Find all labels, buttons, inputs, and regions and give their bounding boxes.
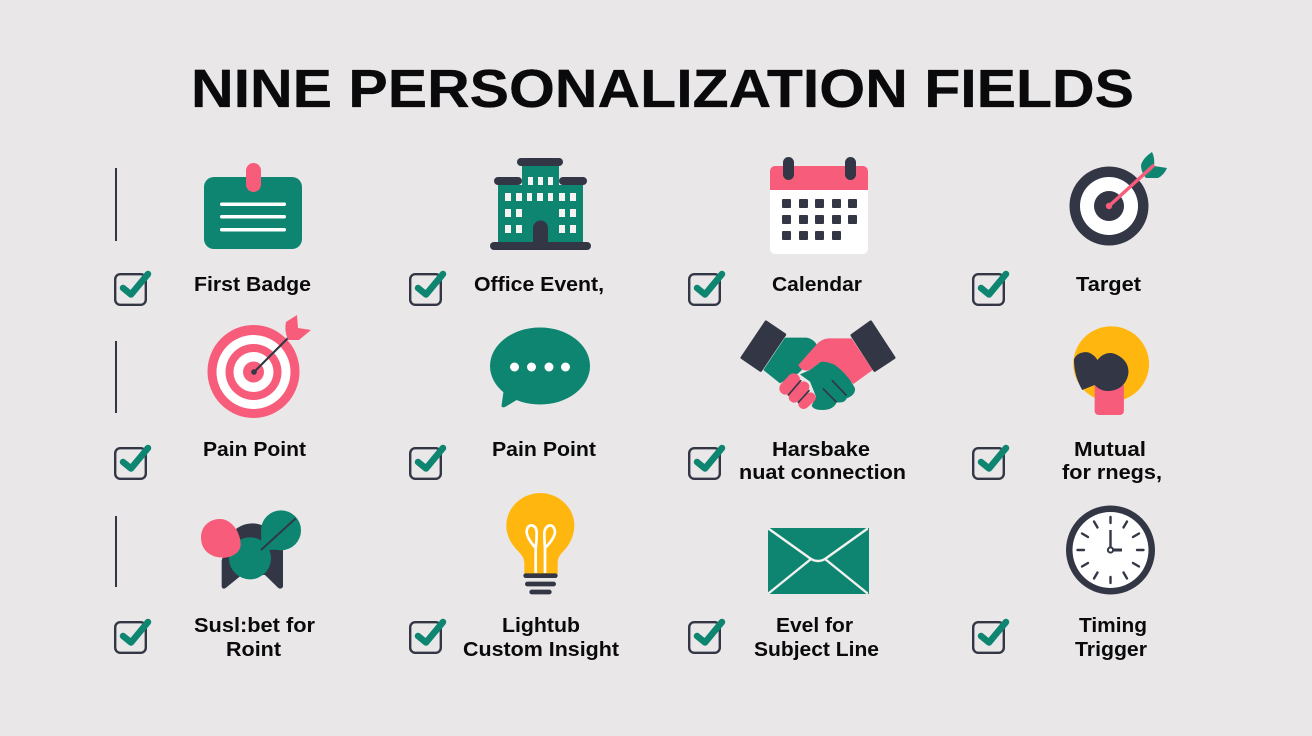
icon: badge bbox=[204, 163, 302, 249]
checkbox: mutual bbox=[973, 448, 1006, 479]
label: first badge: First Badge bbox=[194, 274, 311, 296]
label: subject for point bbox=[194, 615, 315, 661]
label: mutual: for rnegs, bbox=[1062, 462, 1162, 484]
checkbox: target bbox=[973, 274, 1006, 305]
checkbox: first badge bbox=[115, 274, 148, 305]
checkbox: office event bbox=[410, 274, 443, 305]
checkbox: subject line bbox=[689, 622, 722, 653]
checkbox: handshake bbox=[689, 448, 722, 479]
icon: envelope bbox=[768, 528, 869, 594]
icon: speech bubble bbox=[490, 328, 590, 407]
label: handshake bbox=[739, 439, 906, 484]
icon: pink target bbox=[208, 315, 311, 418]
label: subject line: Subject Line bbox=[754, 639, 879, 661]
label: subject line: Evel for bbox=[776, 615, 853, 637]
label: timing trigger bbox=[1075, 615, 1147, 661]
row marker line 3 bbox=[115, 516, 117, 587]
label: timing trigger: Timing bbox=[1079, 615, 1147, 637]
checkbox: timing trigger bbox=[973, 622, 1006, 653]
title: NINE PERSONALIZATION FIELDS bbox=[191, 59, 1134, 119]
label: mutual: Mutual bbox=[1074, 439, 1146, 461]
icon: office building bbox=[490, 158, 591, 250]
label: subject for point: Roint bbox=[226, 639, 281, 661]
icon: handshake bbox=[742, 322, 894, 410]
label: office event: Office Event, bbox=[474, 274, 604, 296]
label: subject line bbox=[754, 615, 879, 661]
label: lightbulb: Lightub bbox=[502, 615, 580, 637]
label: calendar: Calendar bbox=[772, 274, 862, 296]
label: timing trigger: Trigger bbox=[1075, 639, 1147, 661]
label: handshake: nuat connection bbox=[739, 462, 906, 484]
checkbox: lightbulb bbox=[410, 622, 443, 653]
label: pain point 2: Pain Point bbox=[492, 439, 596, 461]
row marker line 1 bbox=[115, 168, 117, 241]
icon: lightbulb bbox=[506, 493, 574, 594]
icon: subject cluster bbox=[201, 510, 301, 589]
label: subject for point: Susl:bet for bbox=[194, 615, 315, 637]
checkbox: calendar bbox=[689, 274, 722, 305]
checkbox: pain point 2 bbox=[410, 448, 443, 479]
icon: dark target bbox=[1070, 152, 1167, 246]
icon: clock bbox=[1066, 506, 1155, 594]
label: target: Target bbox=[1076, 274, 1141, 296]
icon: mutual bbox=[1073, 326, 1149, 415]
label: pain point 1: Pain Point bbox=[203, 439, 306, 461]
icon: calendar bbox=[770, 157, 868, 254]
label: handshake: Harsbake bbox=[772, 439, 870, 461]
label: lightbulb: Custom Insight bbox=[463, 639, 619, 661]
checkbox: pain point 1 bbox=[115, 448, 148, 479]
label: lightbulb bbox=[463, 615, 619, 661]
row marker line 2 bbox=[115, 341, 117, 413]
label: mutual bbox=[1062, 439, 1162, 484]
checkbox: subject for point bbox=[115, 622, 148, 653]
